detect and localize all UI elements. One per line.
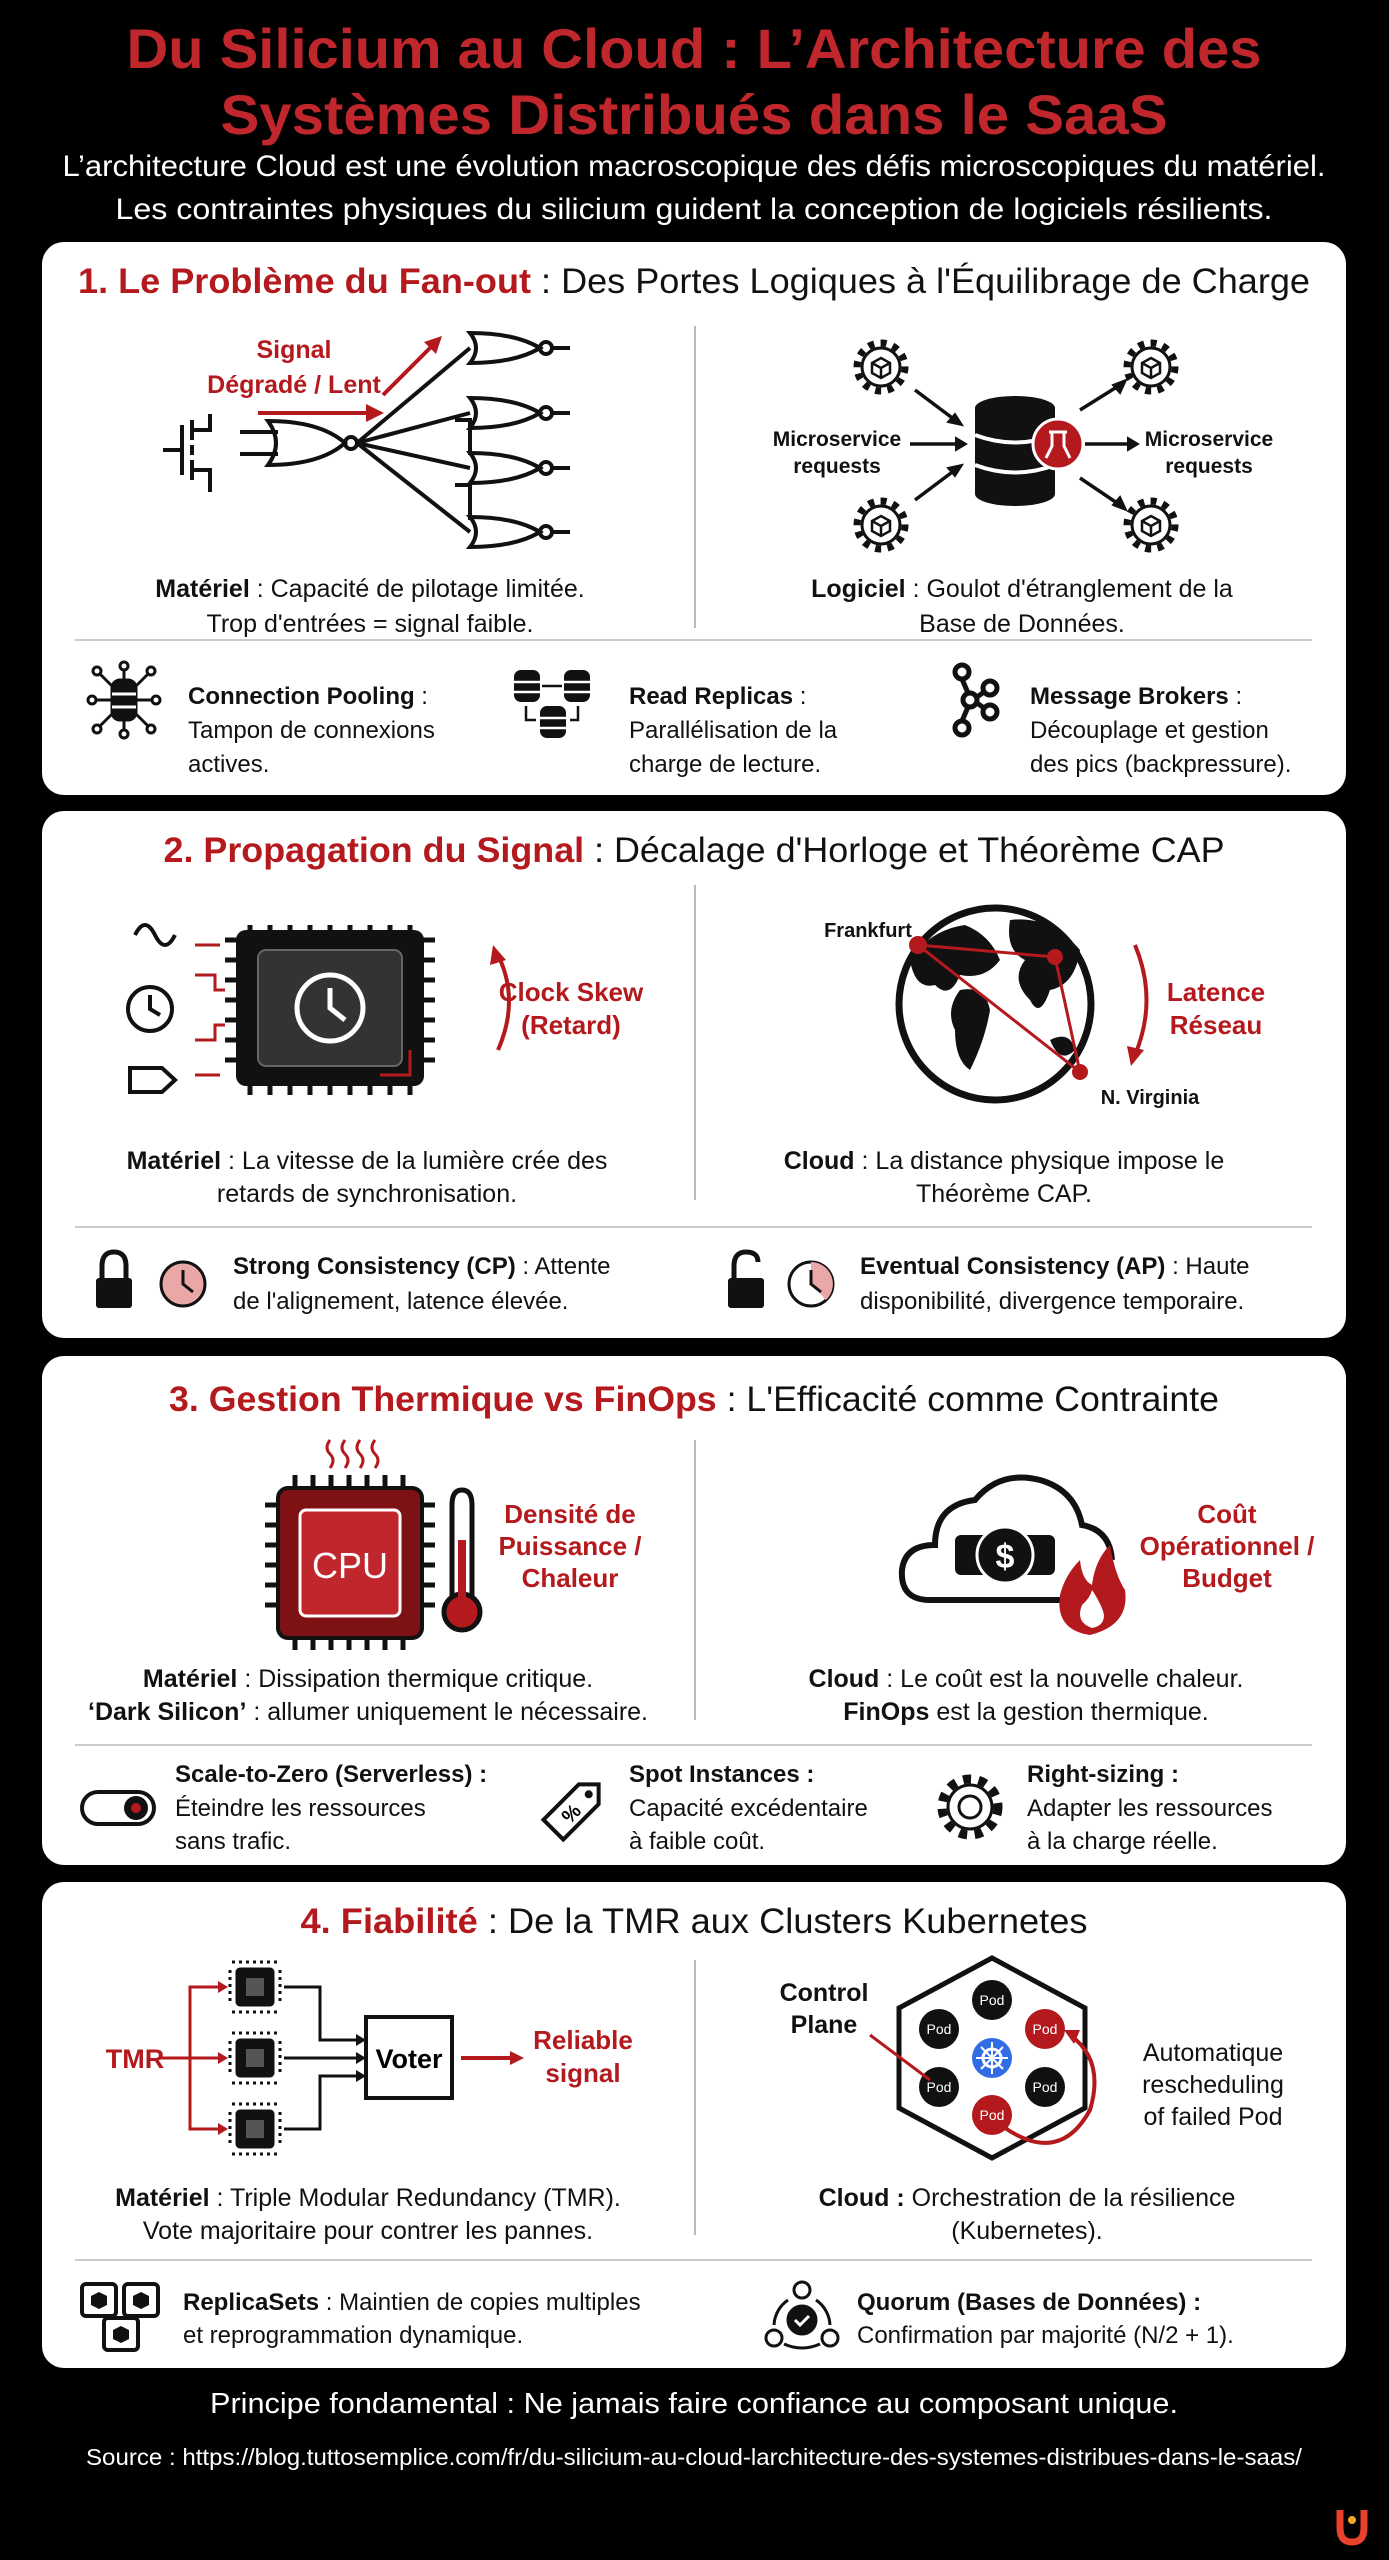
label: clock skew: (Retard) [521,1010,621,1040]
caption: TMR: Vote majoritaire pour contrer les pannes. [143,2217,593,2245]
icon: logo [1340,2510,1364,2542]
caption: cost is heat: FinOps est la gestion thermique. [843,1698,1209,1726]
text: read replicas [629,683,838,778]
labels: globe locations [824,920,1200,1109]
text: quorum: Quorum (Bases de Données) : [857,2289,1201,2316]
text: spot instances: à faible coût. [629,1828,765,1855]
footer: principle: Principe fondamental : Ne jamais faire confiance au composant unique. [210,2388,1178,2420]
icon: hot cpu: CPU [312,1545,388,1586]
text: eventual consistency [860,1253,1249,1315]
icons: microservice gears [857,343,1175,549]
text: scale to zero: sans trafic. [175,1828,291,1855]
label: TMR: TMR [106,2044,164,2074]
text: eventual consistency: disponibilité, divergence temporaire. [860,1288,1244,1315]
label: automatic rescheduling: of failed Pod [1144,2103,1282,2131]
label: clock skew: Clock Skew [499,977,644,1007]
icon: open lock with clock [728,1252,833,1308]
label: reliable signal: signal [545,2058,621,2088]
text: spot instances: Capacité excédentaire [629,1795,868,1822]
text: replicasets: ReplicaSets : Maintien de copies multiples [183,2289,641,2316]
labels: globe locations: Frankfurt [824,920,912,942]
text: spot instances: Spot Instances : [629,1761,814,1788]
text: strong consistency [233,1253,610,1315]
illustration: database bottleneck [975,396,1083,506]
icons: signal sources [128,925,175,1092]
icon: replicasets [82,2284,158,2350]
subtitle [62,150,1325,226]
label: control plane: Control [780,1979,868,2007]
caption: thermal dissipation [88,1665,648,1726]
text: replicasets [183,2289,641,2349]
labels: microservice requests: requests [793,455,881,478]
illustration: kubernetes cluster: Pod [980,1992,1004,2008]
label: automatic rescheduling: Automatique [1143,2039,1283,2067]
text: message brokers [1030,683,1291,778]
text: strong consistency: Strong Consistency (CP) : Attente [233,1253,610,1280]
illustration: kubernetes cluster: Pod [980,2107,1004,2123]
labels: globe locations: N. Virginia [1101,1087,1200,1109]
text: connection pooling [188,683,435,778]
caption: thermal dissipation: Matériel : Dissipation thermique critique. [143,1665,593,1693]
caption: kubernetes: Cloud : Orchestration de la résilience [819,2184,1235,2212]
label: control plane: Plane [791,2011,857,2039]
icon: toggle off [82,1792,154,1824]
text: connection pooling: Connection Pooling : [188,683,428,710]
illustration: kubernetes cluster: Pod [927,2021,951,2037]
text: read replicas: Parallélisation de la [629,717,838,744]
text: quorum [857,2289,1234,2349]
text: right sizing: Right-sizing : [1027,1761,1179,1788]
caption: hardware fan-out: Trop d'entrées = signal faible. [207,610,533,638]
footer: source: Source : https://blog.tuttosemplice.com/fr/du-silicium-au-cloud-larchitecture-des-systemes-distribues-dans-le-saas/ [86,2444,1303,2470]
heading: panel 2: 2. Propagation du Signal : Décalage d'Horloge et Théorème CAP [164,831,1224,870]
subtitle: Les contraintes physiques du silicium guident la conception de logiciels résilients. [116,193,1272,226]
icon: closed lock with clock [96,1252,205,1308]
caption: cloud CAP: Cloud : La distance physique impose le [784,1147,1224,1175]
panel: thermal vs finops [42,1356,1346,1865]
icon: price tag: % [558,1800,586,1828]
text: scale to zero: Scale-to-Zero (Serverless) : [175,1761,487,1788]
text: message brokers: Message Brokers : [1030,683,1242,710]
labels: microservice requests: Microservice [773,428,901,451]
icon: read replicas [514,670,590,738]
label: automatic rescheduling [1142,2039,1284,2131]
text: right sizing: Adapter les ressources [1027,1795,1272,1822]
illustration: globe [899,908,1091,1100]
caption: hardware latency: Matériel : La vitesse de la lumière crée des [127,1147,607,1175]
label: reliable signal [533,2025,633,2088]
panel: reliability [42,1882,1346,2368]
caption: hardware fan-out: Matériel : Capacité de pilotage limitée. [155,575,585,603]
arrow: degraded signal [258,336,442,422]
panel: fan-out [42,242,1346,795]
icon: gear [942,1779,998,1835]
text: connection pooling: Tampon de connexions [188,717,435,744]
text: strong consistency: de l'alignement, latence élevée. [233,1288,568,1315]
text: scale to zero [175,1761,487,1855]
illustration: kubernetes cluster [870,1958,1094,2158]
icon: hot cpu [265,1440,435,1650]
label: operational cost [1140,1499,1314,1593]
text: replicasets: et reprogrammation dynamique. [183,2322,523,2349]
caption: kubernetes: (Kubernetes). [951,2217,1103,2245]
icon: quorum [766,2282,838,2348]
caption: TMR: Matériel : Triple Modular Redundancy (TMR). [115,2184,621,2212]
caption: hardware latency [127,1147,607,1208]
label: signal degrade: Signal [256,336,332,364]
icon: thermometer [444,1490,480,1630]
label: operational cost: Coût [1197,1499,1257,1529]
icon: connection pooling [88,662,160,738]
caption: kubernetes [819,2184,1235,2245]
label: power density: Densité de [504,1499,636,1529]
title: Du Silicium au Cloud : L’Architecture des [126,17,1262,80]
labels: microservice requests: requests [1165,455,1253,478]
caption: software bottleneck [811,575,1233,638]
text: spot instances [629,1761,868,1855]
label: network latency [1167,977,1265,1040]
text: connection pooling: actives. [188,751,269,778]
label: power density: Chaleur [522,1563,618,1593]
text: right sizing [1027,1761,1272,1855]
caption: cloud CAP [784,1147,1224,1208]
heading: panel 4: 4. Fiabilité : De la TMR aux Clusters Kubernetes [300,1902,1088,1941]
caption: software bottleneck: Base de Données. [919,610,1125,638]
heading: panel 3: 3. Gestion Thermique vs FinOps : L'Efficacité comme Contrainte [169,1380,1219,1419]
illustration: logic gates fan-out [163,333,570,547]
caption: hardware latency: retards de synchronisation. [217,1180,517,1208]
text: message brokers: Découplage et gestion [1030,717,1269,744]
label: signal degrade [207,336,381,399]
text: read replicas: charge de lecture. [629,751,821,778]
caption: software bottleneck: Logiciel : Goulot d'étranglement de la [811,575,1233,603]
labels: microservice requests [773,428,1273,478]
caption: hardware fan-out [155,575,585,638]
label: clock skew [499,977,644,1040]
label: signal degrade: Dégradé / Lent [207,371,381,399]
label: network latency: Réseau [1170,1010,1262,1040]
caption: TMR [115,2184,621,2245]
heading: panel 1: 1. Le Problème du Fan-out : Des Portes Logiques à l'Équilibrage de Charge [78,262,1310,301]
label: automatic rescheduling: rescheduling [1142,2071,1284,2099]
icon: cloud with coins and fire [902,1478,1126,1635]
labels: microservice requests: Microservice [1145,428,1273,451]
title [126,17,1262,146]
label: network latency: Latence [1167,977,1265,1007]
label: operational cost: Budget [1182,1563,1272,1593]
arrow: clock skew [490,945,509,1050]
illustration: kubernetes cluster: Pod [1033,2079,1057,2095]
caption: cost is heat [809,1665,1243,1726]
label: control plane [780,1979,868,2039]
illustration: TMR chips and voter [160,1962,524,2154]
icon: price tag [543,1774,609,1840]
illustration: kubernetes cluster: Pod [1033,2021,1057,2037]
label: operational cost: Opérationnel / [1140,1531,1314,1561]
text: message brokers: des pics (backpressure). [1030,751,1291,778]
label: reliable signal: Reliable [533,2025,633,2055]
text: scale to zero: Éteindre les ressources [175,1795,426,1822]
illustration: TMR chips and voter: Voter [375,2044,443,2074]
arrow: network latency [1127,945,1146,1066]
text: read replicas: Read Replicas : [629,683,806,710]
label: power density [498,1499,642,1593]
icon: cloud with coins and fire: $ [996,1538,1015,1576]
subtitle: L’architecture Cloud est une évolution macroscopique des défis microscopiques du matériel. [62,150,1325,183]
label: power density: Puissance / [498,1531,642,1561]
caption: thermal dissipation: ‘Dark Silicon’ : allumer uniquement le nécessaire. [88,1698,648,1726]
illustration: chip with clock [195,925,435,1095]
panel: signal propagation [42,811,1346,1338]
caption: cost is heat: Cloud : Le coût est la nouvelle chaleur. [809,1665,1243,1693]
illustration: kubernetes cluster: Pod [927,2079,951,2095]
text: eventual consistency: Eventual Consistency (AP) : Haute [860,1253,1249,1280]
icon: message brokers [955,665,997,735]
text: quorum: Confirmation par majorité (N/2 + 1). [857,2322,1234,2349]
text: right sizing: à la charge réelle. [1027,1828,1218,1855]
caption: cloud CAP: Théorème CAP. [916,1180,1092,1208]
title: Systèmes Distribués dans le SaaS [220,83,1168,146]
